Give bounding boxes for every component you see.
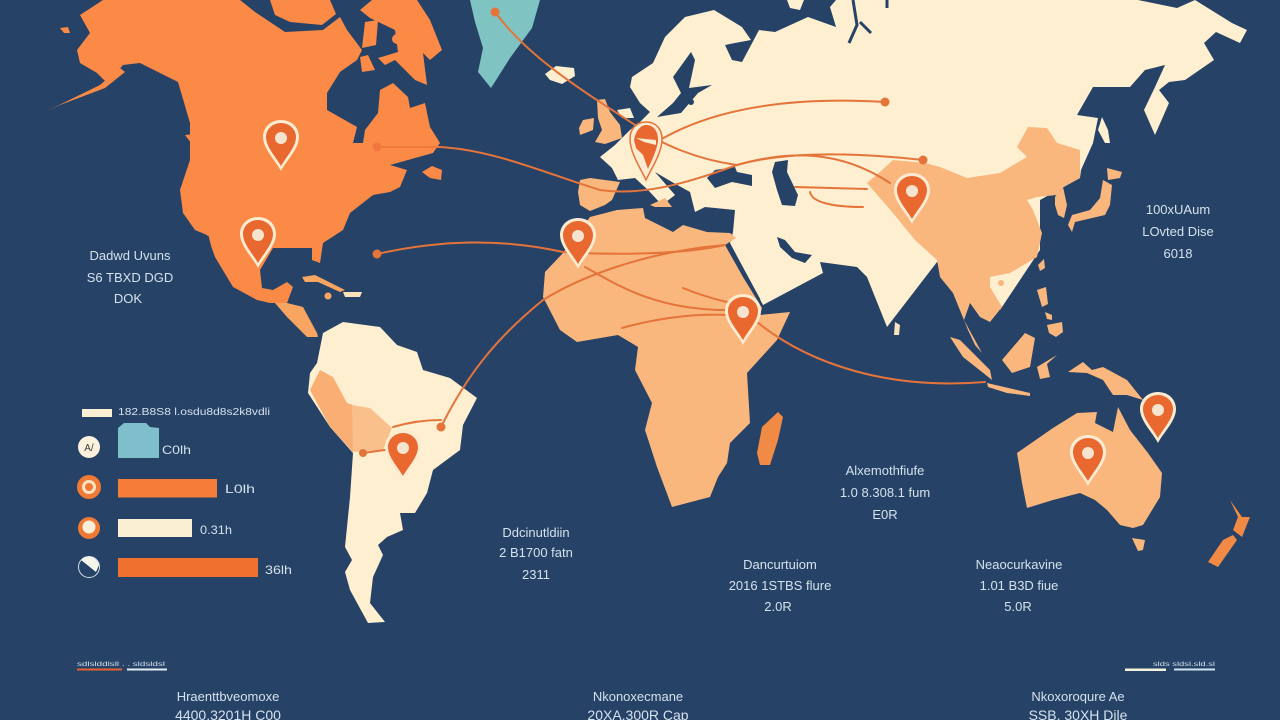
footer: right note: slds sldsl.sld.sl bbox=[1153, 662, 1215, 668]
text block: South Atlantic: Ddcinutldiin bbox=[502, 525, 570, 540]
row 4: orange bar bbox=[78, 556, 292, 578]
continent: Eurasia bbox=[600, 0, 1247, 327]
footer stat: centre bbox=[587, 689, 689, 720]
text block: south east bbox=[976, 557, 1062, 614]
row 2: orange bar bbox=[77, 475, 255, 499]
text block: south centre: Dancurtuiom bbox=[743, 557, 817, 572]
map pins bbox=[240, 120, 1176, 486]
row 3: cream bar: 0.31h bbox=[200, 523, 232, 537]
text block: south centre bbox=[729, 557, 831, 614]
country: UK and Ireland bbox=[579, 99, 622, 144]
continent: North America bbox=[45, 0, 442, 303]
island: Sri Lanka bbox=[894, 322, 900, 335]
footer stat: right: Nkoxoroqure Ae bbox=[1031, 689, 1125, 704]
text block: Indian Ocean bbox=[840, 463, 930, 522]
footer stat: left: Hraenttbveomoxe bbox=[177, 689, 279, 704]
island: Madagascar bbox=[757, 412, 783, 465]
text block: South Atlantic: 2 B1700 fatn bbox=[499, 545, 573, 560]
island: Iceland bbox=[545, 66, 575, 84]
islands: Denmark and Baltic bbox=[617, 108, 634, 118]
row 2: orange bar: L0lh bbox=[225, 482, 255, 496]
legend bar chart bbox=[77, 407, 292, 578]
text block: south east: Neaocurkavine bbox=[976, 557, 1062, 572]
region: Italy and Greece accents bbox=[650, 198, 672, 207]
text block: left: Dadwd Uvuns bbox=[90, 248, 171, 263]
footer: left note bbox=[77, 662, 167, 670]
country: Spain bbox=[578, 178, 620, 211]
island: Sakhalin bbox=[1098, 117, 1110, 143]
continent: Australia bbox=[1017, 407, 1162, 551]
continent: South America bbox=[308, 322, 477, 623]
seas bbox=[657, 0, 887, 263]
text block: left: DOK bbox=[114, 291, 142, 306]
text block: left: S6 TBXD DGD bbox=[87, 270, 173, 285]
text block: south east: 5.0R bbox=[1004, 599, 1032, 614]
text block: top right: LOvted Dise bbox=[1142, 224, 1214, 239]
text block: top right: 100xUAum bbox=[1146, 202, 1210, 217]
text block: South Atlantic bbox=[499, 525, 573, 582]
text block: Indian Ocean: E0R bbox=[872, 507, 898, 522]
text block: Indian Ocean: Alxemothfiufe bbox=[846, 463, 924, 478]
continent: Africa bbox=[543, 208, 790, 507]
text block: left bbox=[87, 248, 173, 306]
islands: Asia Pacific bbox=[950, 168, 1143, 400]
region: China and Southeast Asia bbox=[867, 127, 1080, 353]
continent: Greenland bbox=[470, 0, 540, 88]
text block: top right: 6018 bbox=[1164, 246, 1192, 261]
footer stat: left bbox=[175, 689, 281, 720]
footer: right note bbox=[1125, 662, 1215, 671]
gulf of California bbox=[207, 236, 216, 271]
row 1: teal bar bbox=[78, 423, 191, 458]
row 1: teal bar: C0lh bbox=[162, 443, 191, 457]
island: New Zealand bbox=[1208, 500, 1250, 567]
row 1: teal bar: A/ bbox=[84, 443, 94, 454]
row 3: cream bar bbox=[78, 517, 232, 539]
text block: south centre: 2.0R bbox=[764, 599, 792, 614]
continent: Central America and Caribbean bbox=[275, 275, 362, 337]
text block: south east: 1.01 B3D fiue bbox=[980, 578, 1058, 593]
text block: South Atlantic: 2311 bbox=[522, 567, 550, 582]
legend swatch and caption: 182.B8S8 l.osdu8d8s2k8vdli bbox=[118, 407, 270, 418]
text block: Indian Ocean: 1.0 8.308.1 fum bbox=[840, 485, 930, 500]
footer: left note: sdlslddlsll . . sldsldsl bbox=[77, 662, 165, 668]
red sea bbox=[728, 243, 759, 300]
legend swatch and caption bbox=[82, 407, 270, 418]
text block: top right bbox=[1142, 202, 1214, 261]
route lines bbox=[359, 8, 985, 457]
footer stat: centre: Nkonoxecmane bbox=[593, 689, 683, 704]
footer stat: right bbox=[1029, 689, 1128, 720]
text block: south centre: 2016 1STBS flure bbox=[729, 578, 831, 593]
row 4: orange bar: 36lh bbox=[265, 563, 292, 577]
arctic islands bbox=[787, 0, 804, 10]
